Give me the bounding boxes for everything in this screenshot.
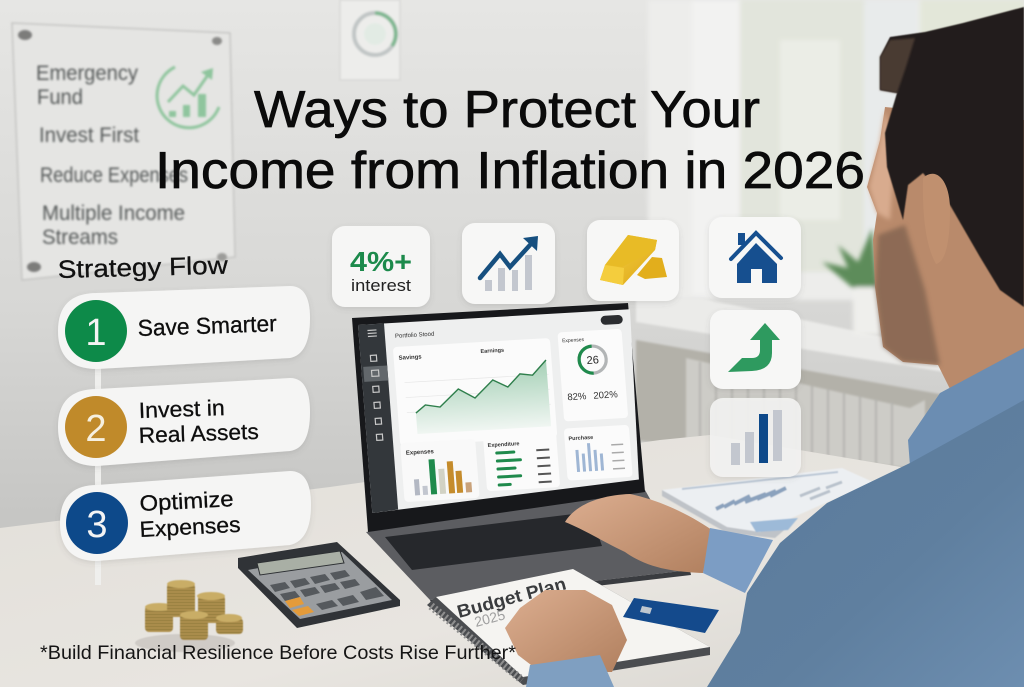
- flow connector line: [95, 360, 101, 585]
- hair front tuft: [880, 38, 915, 93]
- purchases bar card: [564, 425, 633, 481]
- forehead highlight: [869, 110, 895, 220]
- savings chart card: Earnings: [480, 348, 504, 355]
- beard stubble: [875, 225, 940, 365]
- dashboard header: Portfolio Stood: [395, 332, 435, 340]
- radiator: [686, 358, 925, 470]
- step 2: [58, 378, 310, 466]
- man seen from behind: [707, 7, 1024, 687]
- step 2: 2: [85, 408, 107, 450]
- savings chart card: [393, 338, 557, 446]
- header button: [600, 315, 623, 325]
- icon card: interest rate: interest: [351, 276, 411, 295]
- savings ring card: Expenses: [562, 337, 585, 344]
- laptop dashboard: [358, 309, 644, 513]
- expenditure list card: Expenditure: [488, 441, 520, 449]
- notebook budget plan: Budget Plan: [455, 574, 568, 622]
- footer tagline: *Build Financial Resilience Before Costs Rise Further*: [40, 642, 516, 664]
- title: Ways to Protect Your: [254, 81, 760, 139]
- icon card: gold bars: [587, 220, 679, 301]
- icon card: rising chart: [462, 223, 555, 304]
- sidebar: [358, 323, 398, 513]
- savings ring card: [557, 329, 628, 422]
- potted plant: [822, 228, 880, 335]
- step 1: 1: [85, 312, 107, 354]
- title: Income from Inflation in 2026: [155, 142, 865, 200]
- purchases bar card: Purchase: [568, 435, 594, 442]
- step 3: Expenses: [139, 512, 241, 542]
- title: [155, 81, 865, 200]
- bank card: [623, 598, 719, 633]
- wall board with strategy notes: Emergency: [36, 62, 138, 85]
- desk: [0, 435, 1024, 687]
- icon card: interest rate: 4%+: [350, 246, 412, 277]
- step 2: Invest in: [138, 395, 225, 423]
- ear: [923, 174, 950, 264]
- icon card: interest rate: [332, 226, 430, 307]
- shirt body: [707, 400, 1024, 687]
- savings ring card: 202%: [593, 389, 619, 402]
- step 3: 3: [86, 504, 108, 546]
- icon card: house: [709, 217, 801, 298]
- neck and face: [867, 107, 1024, 395]
- hair: [880, 7, 1024, 307]
- window: [648, 0, 1024, 300]
- step 3: [60, 471, 311, 561]
- calculator: [238, 542, 400, 628]
- step 3: Optimize: [139, 486, 234, 516]
- strategy flow heading: Strategy Flow: [57, 252, 229, 284]
- wall board with strategy notes: Invest First: [39, 124, 139, 147]
- shirt collar: [908, 348, 1024, 466]
- savings ring card: 82%: [567, 391, 587, 403]
- savings chart card: Savings: [399, 354, 423, 362]
- expenditure list card: [483, 431, 560, 491]
- step 1: Save Smarter: [137, 310, 277, 341]
- laptop base with keyboard: [366, 490, 691, 605]
- notebook budget plan: 2025: [473, 606, 507, 630]
- papers with report chart: [662, 468, 873, 538]
- wall board with strategy notes: Streams: [42, 226, 118, 249]
- notebook budget plan: [427, 569, 710, 685]
- step 1: [58, 286, 310, 369]
- wall board with strategy notes: Multiple Income: [42, 202, 185, 225]
- wall poster with ring: [340, 0, 400, 80]
- savings ring card: 26: [586, 354, 599, 367]
- wall board with strategy notes: [12, 23, 235, 280]
- expenses bar card: Expenses: [406, 449, 435, 457]
- icon card: green arrow: [710, 310, 801, 389]
- laptop screen bezel: [352, 303, 645, 532]
- step 2: Real Assets: [138, 419, 259, 448]
- expenses bar card: [400, 439, 480, 502]
- wall board with strategy notes: Fund: [37, 86, 83, 109]
- left hand on notebook: [505, 590, 627, 687]
- right forearm and hand on keyboard: [565, 494, 773, 593]
- wall board with strategy notes: Reduce Expenses: [40, 164, 188, 187]
- icon card: bar chart: [710, 398, 801, 477]
- stack of gold coins: [135, 580, 243, 652]
- window sill: [636, 298, 945, 480]
